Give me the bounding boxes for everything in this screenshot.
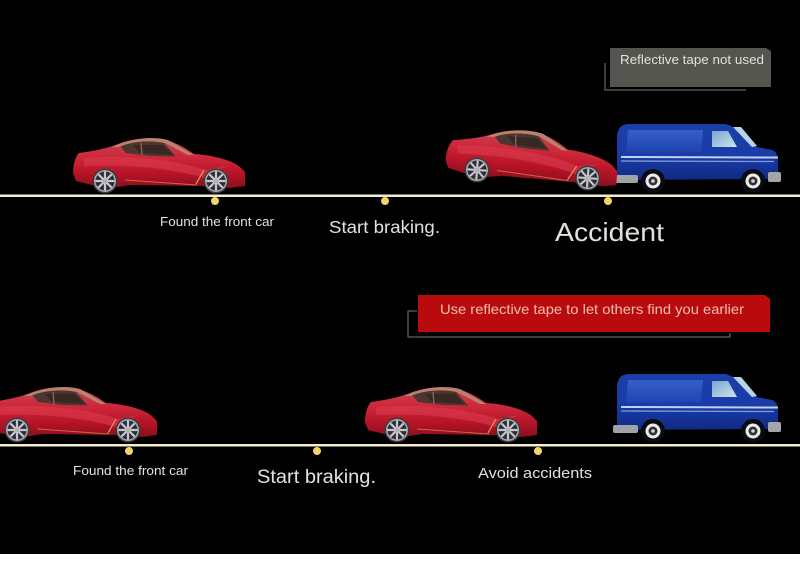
callout: use reflective tape: Use reflective tape to let others find you earlier [440,301,744,317]
callout: reflective tape not used [605,48,771,90]
callout: use reflective tape [408,295,770,337]
marker: accident [604,197,612,205]
car: red coupe partly cropped at left [0,387,157,442]
marker: avoid accidents [534,447,542,455]
marker: found the front car [211,197,219,205]
car: red coupe colliding with van [444,125,620,193]
road line [0,194,800,197]
label: start braking: Start braking. [257,467,376,488]
van: blue van with reflective tape [613,374,781,443]
label: accident: Accident [555,217,665,247]
van: blue van without reflective tape [613,124,781,193]
panel: reflective tape used [0,295,800,488]
road line [0,444,800,446]
label: start braking: Start braking. [329,217,440,237]
callout: reflective tape not used: Reflective tape not used [620,52,764,67]
car: approaching red coupe [73,138,245,194]
label: found the front car: Found the front car [73,464,188,478]
panel: reflective tape not used [0,48,800,247]
label: found the front car: Found the front car [160,215,274,229]
label: avoid accidents: Avoid accidents [478,465,592,482]
marker: start braking [313,447,321,455]
marker: found the front car [125,447,133,455]
car: red coupe stopped safely [365,387,537,442]
marker: start braking [381,197,389,205]
